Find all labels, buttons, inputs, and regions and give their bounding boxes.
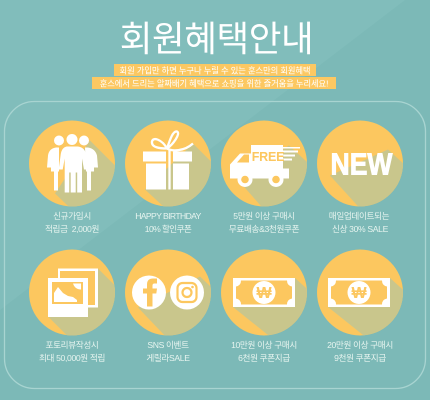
benefit: 200k coupon — [317, 250, 403, 362]
banner: intro text: 회원 가입만 하면 누구나 누릴 수 있는 훈스만의 회원혜택 — [120, 65, 310, 75]
label: 신규가입시 — [53, 211, 91, 221]
benefit: new arrivals — [317, 120, 403, 233]
label: 9천원 쿠폰지급 — [334, 353, 386, 363]
banner: intro text — [92, 64, 336, 89]
benefit: free delivery — [221, 120, 307, 233]
label: 신상 30% SALE — [332, 224, 389, 234]
label: 무료배송&3천원쿠폰 — [229, 224, 300, 234]
icon: delivery truck: FREE — [252, 150, 284, 164]
label: SNS 이벤트 — [147, 340, 189, 350]
label: HAPPY BIRTHDAY — [135, 211, 202, 221]
benefit: birthday — [125, 120, 211, 233]
icon: photos — [29, 250, 115, 336]
label: 게릴라SALE — [146, 353, 190, 363]
label: 포토리뷰작성시 — [46, 340, 98, 350]
banner: intro text: 훈스에서 드리는 알짜배기 혜택으로 쇼핑을 위한 즐거움을 누리세요! — [100, 78, 328, 88]
label: 최대 50,000원 적립 — [39, 352, 105, 363]
label: 10만원 이상 구매시 — [231, 340, 297, 350]
panel: benefits frame — [4, 102, 426, 388]
icon: banknote: ₩ — [256, 285, 272, 302]
benefit: photo review — [29, 250, 115, 362]
benefit: SNS event — [125, 250, 211, 362]
icon: people — [29, 120, 115, 206]
title: 회원혜택안내 — [120, 19, 313, 59]
icon: banknote: ₩ — [351, 285, 367, 302]
label: 5만원 이상 구매시 — [233, 211, 295, 221]
label: 20만원 이상 구매시 — [327, 340, 393, 350]
benefit: 100k coupon — [221, 250, 307, 362]
benefit: new member — [29, 120, 115, 233]
label: 매일업데이트되는 — [329, 211, 390, 221]
icon: NEW: NEW — [330, 146, 393, 182]
label: 적립금 2,000원 — [45, 223, 99, 234]
icon: gift box — [125, 120, 211, 206]
icon: facebook and instagram — [125, 250, 211, 336]
label: 10% 할인쿠폰 — [145, 224, 192, 234]
label: 6천원 쿠폰지급 — [238, 353, 290, 363]
